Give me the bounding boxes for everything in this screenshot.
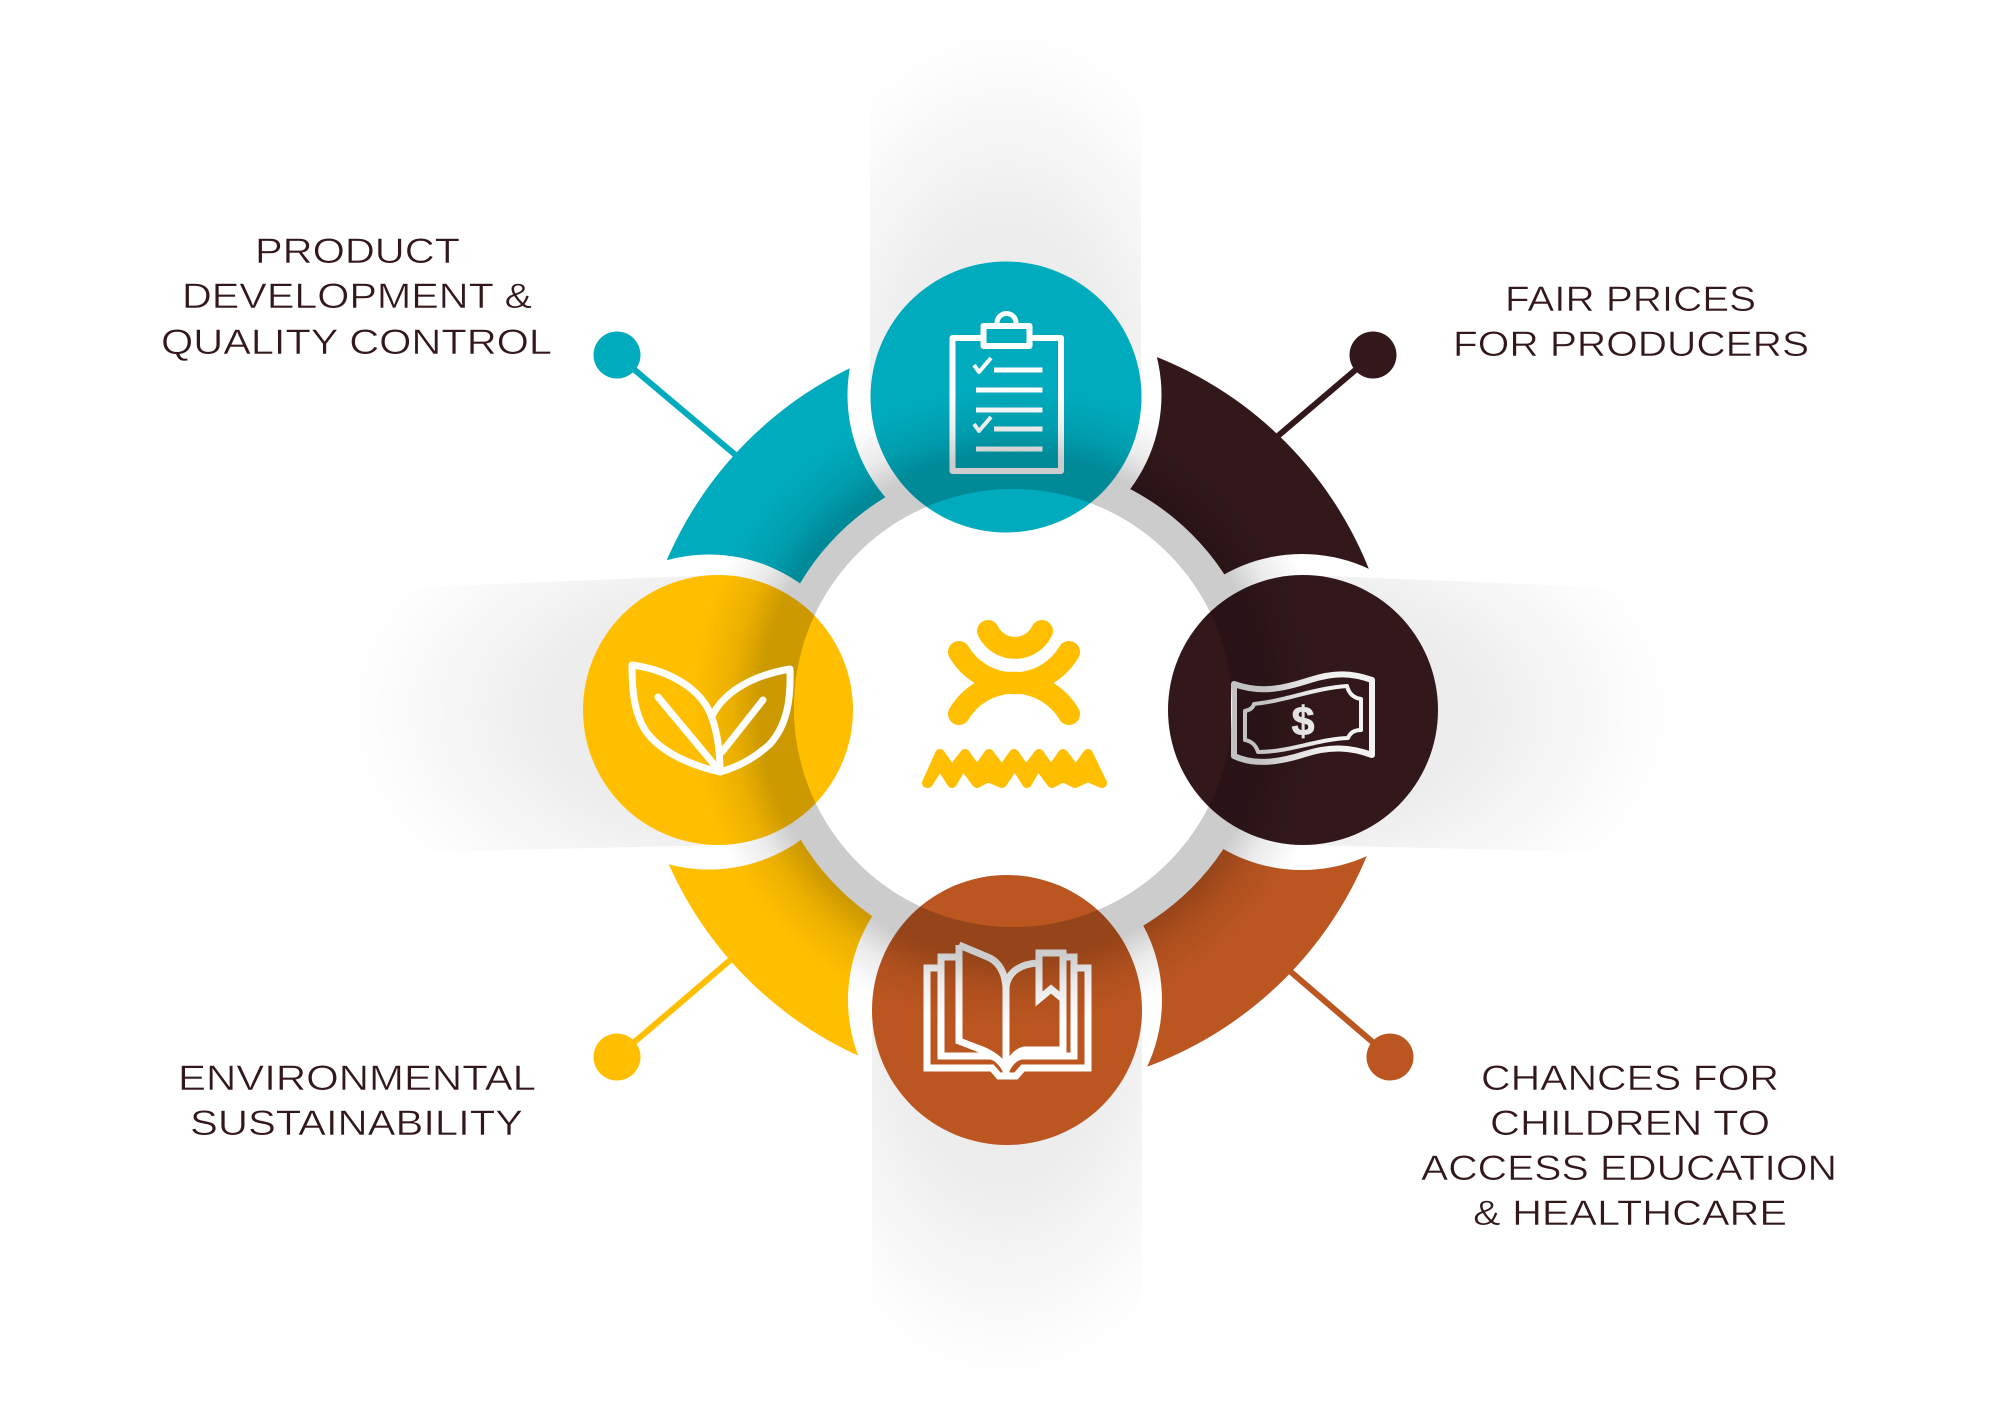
- icon: open book: [927, 945, 1088, 1078]
- label: environmental sustainability: ENVIRONMENTAL: [178, 1059, 536, 1098]
- label: chances for children: ACCESS EDUCATION: [1421, 1149, 1837, 1188]
- node: yellow circle: [583, 575, 853, 845]
- icon: clipboard: [952, 314, 1061, 471]
- label: chances for children: CHANCES FOR: [1481, 1059, 1779, 1098]
- centre ring shadow over bands and circles: [693, 388, 1333, 1028]
- label: chances for children: CHILDREN TO: [1490, 1104, 1770, 1143]
- label: product development and quality control: DEVELOPMENT &: [182, 277, 532, 316]
- ring bands in four colours: [666, 357, 1369, 1067]
- label: environmental sustainability: SUSTAINABILITY: [190, 1104, 523, 1143]
- label: fair prices for producers: FOR PRODUCERS: [1453, 325, 1809, 364]
- label: environmental sustainability: [178, 1059, 536, 1143]
- shadow strip: top: [870, 0, 1141, 397]
- label: product development and quality control: PRODUCT: [255, 232, 460, 271]
- label: chances for children: & HEALTHCARE: [1473, 1194, 1787, 1233]
- connector: dark line and dot: [1272, 332, 1396, 441]
- shadow strip: right: [1303, 575, 1720, 855]
- label: fair prices for producers: [1453, 280, 1809, 364]
- node: rust circle with book icon: [872, 875, 1142, 1145]
- label: chances for children: [1421, 1059, 1837, 1233]
- connector: teal line and dot: [594, 332, 745, 463]
- icon: leaves: [632, 665, 790, 772]
- icon: banknote: [1234, 674, 1372, 762]
- connector: rust line and dot: [1284, 966, 1414, 1080]
- label: product development and quality control: QUALITY CONTROL: [161, 323, 552, 362]
- node: teal circle with clipboard icon: [870, 262, 1142, 532]
- shadow strip: left: [300, 575, 718, 855]
- centre logo: [927, 631, 1102, 783]
- label: product development and quality control: [161, 232, 552, 362]
- connector: yellow line and dot: [594, 956, 735, 1080]
- shadow strip: bottom: [872, 1010, 1142, 1410]
- label: fair prices for producers: FAIR PRICES: [1505, 280, 1756, 319]
- icon: banknote: $: [1292, 698, 1315, 744]
- node: dark circle with banknote icon: [1168, 575, 1438, 845]
